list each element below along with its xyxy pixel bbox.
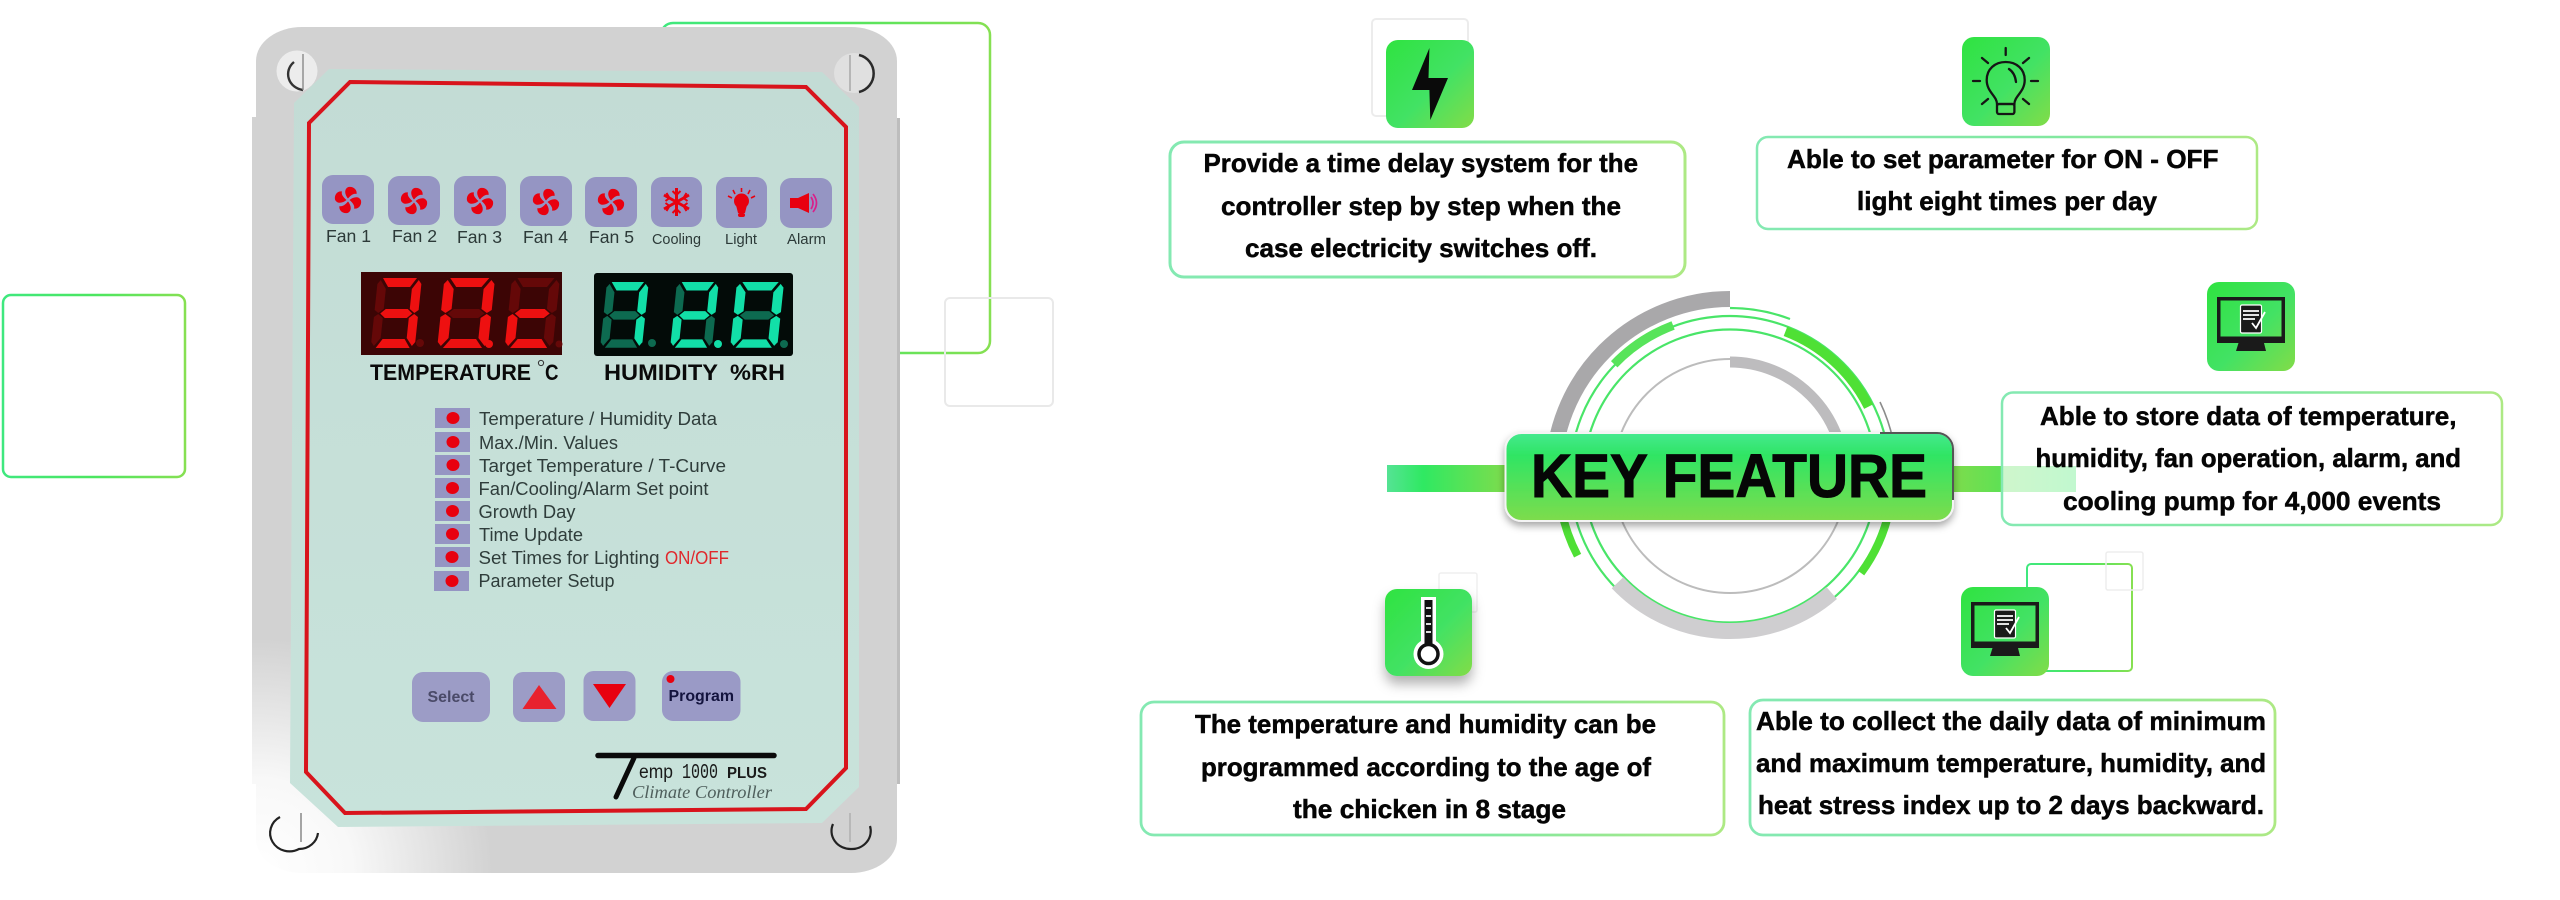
decorative outline: pale grey square [945, 298, 1053, 406]
indicator button: Cooling [651, 177, 702, 248]
humidity LED display [594, 273, 793, 356]
ring: thin grey right arc [1880, 402, 1893, 440]
humidity label: %RH [730, 360, 785, 385]
red panel border [306, 82, 846, 813]
feature box: time delay: controller step by step when the [1221, 191, 1621, 221]
decorative: grey outline behind thermometer icon [1439, 573, 1477, 612]
humidity label: HUMIDITY [604, 360, 718, 385]
ring: thin green outer [1570, 316, 1890, 636]
temperature label: TEMPERATURE [370, 360, 531, 385]
menu row: Time Update [435, 524, 583, 545]
mint control panel [290, 69, 859, 827]
feature box: daily data: heat stress index up to 2 days backward. [1758, 790, 2264, 820]
screw: top right [834, 53, 874, 93]
indicator button: Fan 1 [322, 175, 374, 246]
feature: time delay icon [1386, 40, 1474, 128]
decorative: green outline behind monitor icon [2027, 564, 2132, 671]
indicator button: Fan 4: Fan 4 [523, 227, 568, 247]
ring: top-right green segment [1786, 331, 1869, 407]
humidity label [604, 360, 785, 385]
menu row: Max./Min. Values: Max./Min. Values [479, 432, 618, 453]
feature box: age program: The temperature and humidity can be [1195, 709, 1656, 739]
key feature banner [1506, 433, 1953, 521]
feature box: light schedule [1757, 137, 2257, 229]
banner title: KEY FEATURE [1531, 442, 1927, 510]
feature box: light schedule: light eight times per day [1857, 186, 2158, 216]
menu row: Target Temperature / T-Curve: Target Temperature / T-Curve [479, 455, 726, 476]
logo: Temp 1000 Plus Climate Controller [598, 756, 774, 802]
logo: Temp 1000 Plus Climate Controller: emp [639, 762, 673, 783]
menu row: Set Times for Lighting ON/OFF [435, 547, 729, 568]
screw: bottom right [832, 813, 871, 849]
indicator button: Cooling: Cooling [652, 231, 701, 248]
feature box: daily data: Able to collect the daily data of minimum [1756, 706, 2266, 736]
connector bar: left [1387, 465, 1507, 492]
indicator button: Fan 5 [585, 177, 637, 247]
connector bar: right [1950, 466, 2076, 492]
device side housing: left [252, 117, 260, 784]
indicator button: Light [716, 177, 767, 248]
device side housing: right [890, 118, 900, 784]
indicator button: Fan 1: Fan 1 [326, 226, 371, 246]
menu row: Parameter Setup: Parameter Setup [478, 570, 614, 591]
button: Program: Program [668, 688, 734, 705]
screw: top left [276, 50, 318, 92]
menu row: Fan/Cooling/Alarm Set point: Fan/Cooling/Alarm Set point [478, 478, 708, 499]
button: down arrow [584, 671, 636, 721]
ring: top-left outer grey arc [1553, 299, 1730, 476]
indicator button: Fan 5: Fan 5 [589, 227, 634, 247]
ring: thin top green arc [1730, 308, 1790, 319]
central rings [1553, 299, 1893, 636]
decorative outline: green square behind controller [661, 23, 990, 353]
menu row: Growth Day [435, 501, 576, 522]
feature box: time delay: case electricity switches off. [1245, 233, 1597, 263]
ring: bottom-right green segment [1861, 510, 1889, 573]
feature box: data storage: humidity, fan operation, alarm, and [2036, 443, 2461, 473]
menu row: Time Update: Time Update [479, 524, 583, 545]
ring: bottom-left green segment [1561, 510, 1578, 556]
button: Select [412, 672, 490, 722]
feature box: daily data [1750, 700, 2275, 835]
temperature label: C [545, 360, 559, 385]
ring: inner thick grey arc [1730, 362, 1844, 476]
screw: bottom left [270, 813, 318, 851]
logo: Temp 1000 Plus Climate Controller: PLUS [727, 765, 767, 782]
logo: Temp 1000 Plus Climate Controller: 1000 [682, 762, 718, 785]
button: Program [662, 671, 740, 721]
controller device [252, 27, 900, 873]
feature box: time delay [1170, 142, 1685, 277]
menu row: Growth Day: Growth Day [478, 501, 576, 522]
decorative: grey outline behind lightning icon [1372, 19, 1468, 116]
ring: bottom grey arc [1618, 583, 1832, 631]
feature: data storage monitor icon [2207, 282, 2295, 371]
feature box: light schedule: Able to set parameter for ON - OFF [1787, 144, 2218, 174]
indicator button: Fan 3: Fan 3 [457, 227, 502, 247]
feature box: data storage: cooling pump for 4,000 events [2063, 486, 2441, 516]
menu row: Temperature / Humidity Data: Temperature / Humidity Data [479, 408, 718, 429]
indicator button: Fan 4 [520, 176, 572, 247]
indicator button: Alarm [780, 178, 832, 248]
feature: daily data monitor icon [1961, 587, 2049, 676]
menu row: Set Times for Lighting ON/OFF: Set Times for Lighting [478, 547, 660, 568]
feature box: daily data: and maximum temperature, humidity, and [1756, 748, 2266, 778]
button: up arrow [513, 672, 565, 722]
feature box: data storage [2002, 392, 2502, 525]
ring: thin green middle [1584, 330, 1876, 622]
feature box: age program: the chicken in 8 stage [1293, 794, 1566, 824]
feature box: age program: programmed according to the age of [1201, 752, 1651, 782]
indicator button: Alarm: Alarm [787, 231, 826, 248]
indicator button: Fan 3 [454, 176, 506, 247]
temperature LED display [361, 272, 562, 355]
feature: light bulb icon [1962, 37, 2050, 126]
decorative: grey outline near monitor icon [2106, 552, 2143, 590]
feature box: data storage: Able to store data of temperature, [2040, 401, 2456, 431]
ring: top-left green segment [1614, 325, 1673, 364]
menu row: Set Times for Lighting ON/OFF: ON/OFF [665, 547, 729, 568]
logo: Temp 1000 Plus Climate Controller: Climate Controller [632, 782, 773, 802]
button: Select: Select [428, 689, 474, 706]
indicator button: Fan 2: Fan 2 [392, 226, 437, 246]
indicator button: Light: Light [725, 231, 758, 248]
feature box: time delay: Provide a time delay system for the [1204, 148, 1638, 178]
feature: thermometer icon [1385, 589, 1472, 676]
decorative outline: left green square [3, 295, 185, 477]
ring: inner thin grey [1613, 359, 1847, 593]
indicator button: Fan 2 [388, 176, 440, 246]
feature box: age program [1141, 702, 1724, 835]
device face plate [256, 27, 897, 873]
